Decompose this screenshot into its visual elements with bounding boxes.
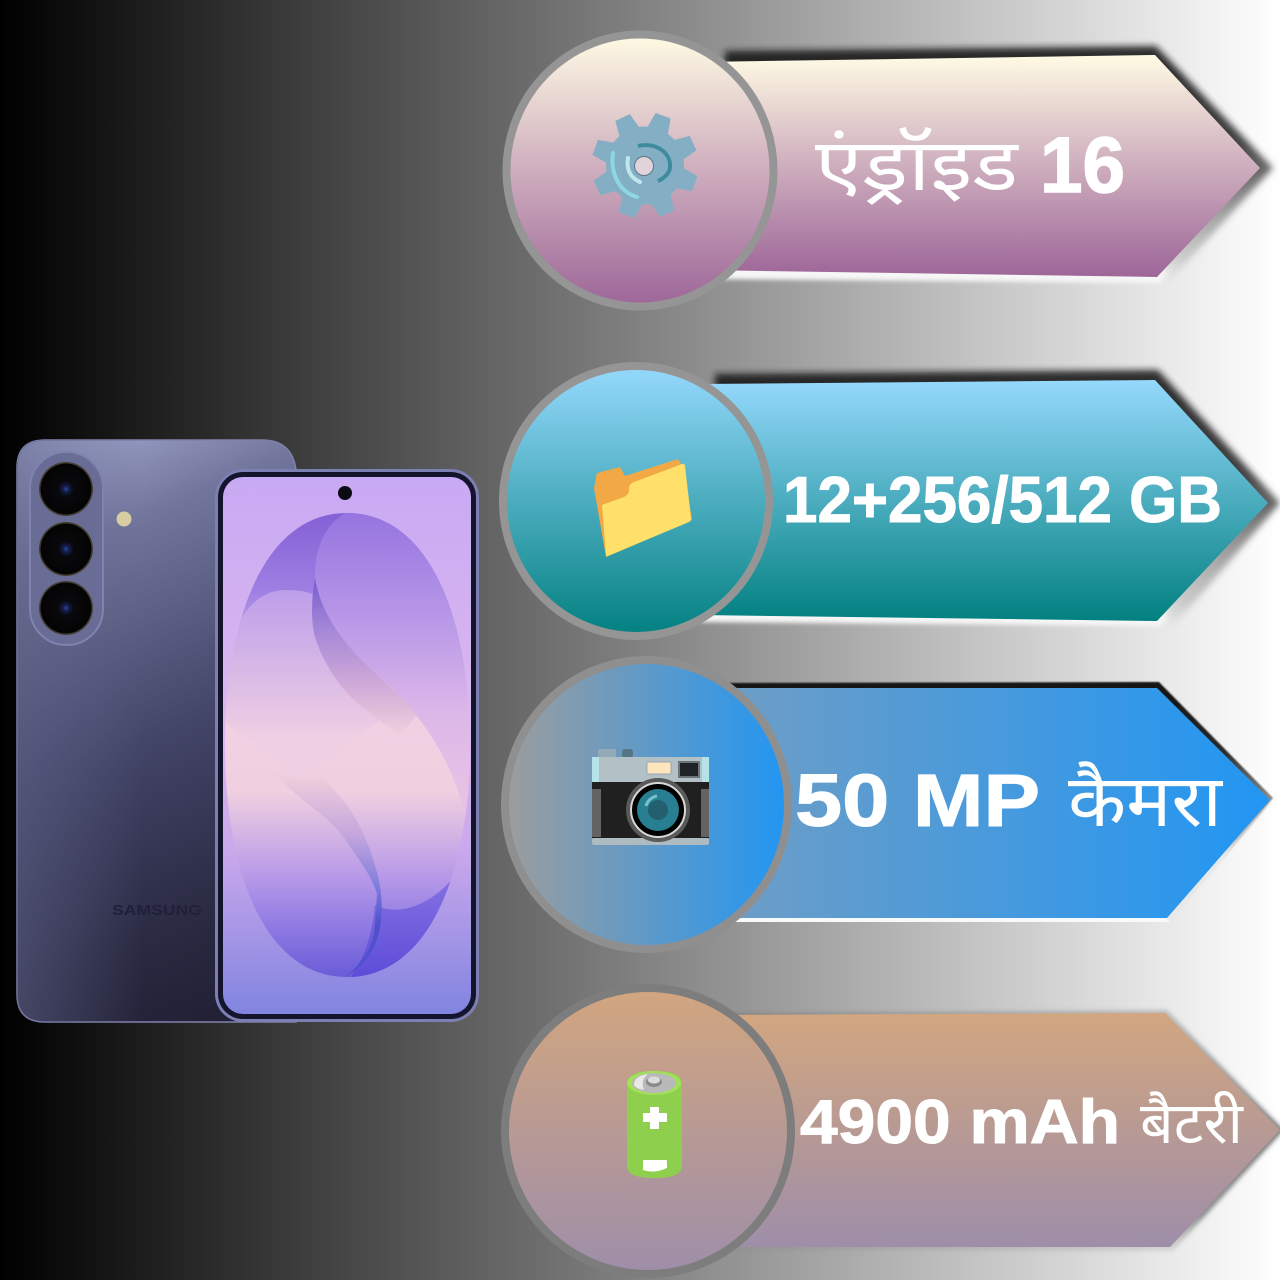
icon: gear	[591, 112, 699, 219]
spec row 1: android	[506, 34, 1273, 306]
ribbon arrow	[700, 46, 1273, 283]
phone image	[17, 440, 480, 1022]
label: android 16	[815, 120, 1125, 209]
label: battery: बैटरी	[1140, 1091, 1244, 1156]
label: android 16: एंड्रॉइड	[815, 126, 1020, 206]
label: storage: 12+256/512 GB	[783, 463, 1222, 536]
icon: camera	[592, 749, 709, 845]
punch hole camera	[338, 486, 352, 500]
icon circle	[505, 988, 791, 1274]
spec row 3: camera	[505, 660, 1273, 949]
icon circle	[503, 366, 769, 636]
label: android 16: 16	[1040, 120, 1125, 209]
ribbon arrow	[700, 682, 1273, 922]
ribbon arrow	[700, 370, 1280, 628]
label: camera	[795, 759, 1223, 842]
spec row 4: battery	[505, 988, 1280, 1274]
samsung logo: SAMSUNG	[112, 902, 202, 919]
spec row 2: storage	[503, 366, 1280, 636]
label: battery	[800, 1088, 1244, 1157]
icon: folder	[594, 459, 692, 557]
label: camera: कैमरा	[1068, 761, 1223, 842]
ribbon arrow	[700, 1010, 1280, 1251]
icon circle	[505, 660, 788, 949]
icon: battery	[627, 1071, 682, 1178]
phone back	[17, 440, 296, 1022]
phone front	[215, 469, 480, 1022]
label: battery: 4900 mAh	[800, 1088, 1120, 1157]
label: camera: 50 MP	[795, 759, 1040, 842]
icon circle	[506, 34, 774, 306]
wallpaper	[220, 505, 480, 990]
